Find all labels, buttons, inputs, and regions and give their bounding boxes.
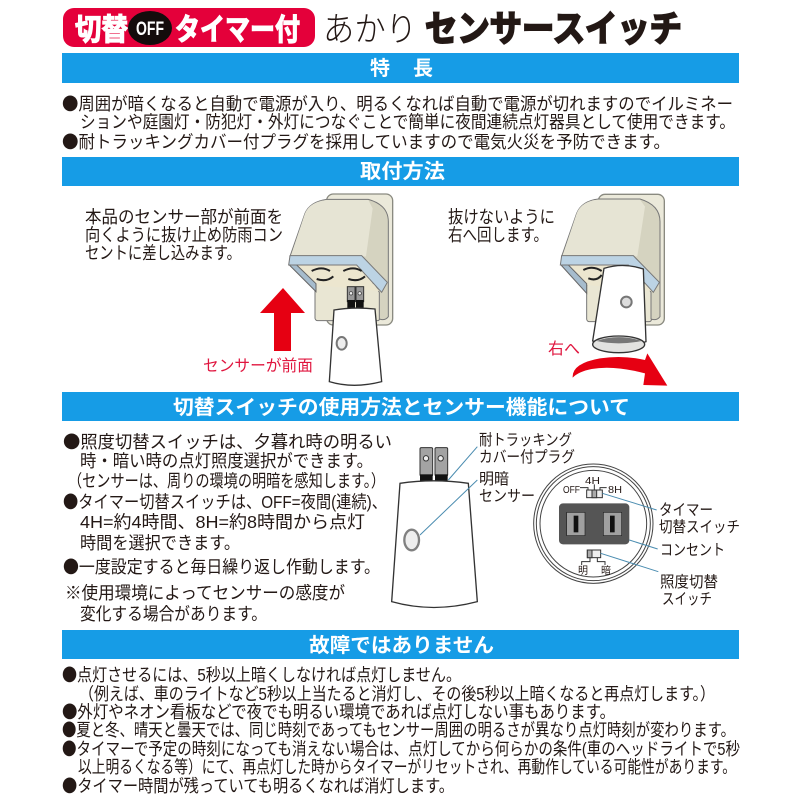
label: コンセント: コンセント	[660, 542, 725, 559]
text block: switch usage: 4H=約4時間、8H=約8時間から点灯	[80, 512, 365, 532]
arrow: red up arrow	[260, 288, 305, 351]
label: タイマー切替スイッチ	[659, 501, 740, 536]
text: step 1 instructions: セントに差し込みます。	[85, 243, 241, 263]
text: step 1 instructions: 本品のセンサー部が前面を	[85, 207, 283, 227]
text block: switch usage: 時間を選択できます。	[80, 533, 240, 553]
badge: 切替 OFF タイマー付: OFF	[136, 19, 164, 40]
heading bar: 取付方法	[62, 157, 739, 186]
label: 耐トラッキングカバー付プラグ: カバー付プラグ	[479, 448, 575, 466]
text block: switch usage	[63, 429, 392, 624]
text: step 2 instructions	[448, 207, 555, 245]
text: step 1 instructions: 向くように抜け止め防雨コン	[85, 225, 283, 245]
label: 右へ: 右へ	[548, 340, 580, 358]
illustration: plug body	[392, 447, 477, 607]
label: 明 暗: 暗	[601, 565, 611, 577]
label: 明暗センサー	[479, 470, 535, 505]
label: タイマー切替スイッチ: 切替スイッチ	[659, 518, 740, 536]
title: あかり: あかり	[323, 11, 417, 49]
badge: 切替 OFF タイマー付: 切替	[75, 14, 128, 47]
text block: switch usage: （センサーは、周りの環境の明暗を感知します。）	[68, 471, 385, 491]
text: step 1 instructions	[85, 207, 283, 263]
heading bar: 故障ではありません: 故障ではありません	[309, 634, 494, 657]
badge: 切替 OFF タイマー付: タイマー付	[175, 14, 300, 47]
text block: switch usage: ●タイマー切替スイッチは、OFF=夜間(連続)、	[63, 489, 387, 514]
label: センサーが前面: センサーが前面	[203, 357, 313, 375]
text block: switch usage: ※使用環境によってセンサーの感度が	[65, 583, 345, 603]
text block: troubleshooting	[62, 662, 740, 798]
text block: features	[62, 91, 735, 154]
diagram: plug face with switches	[534, 464, 740, 608]
text block: troubleshooting: ●点灯させるには、5秒以上暗くしなければ点灯しません。	[62, 662, 461, 687]
label: 照度切替スイッチ: スイッチ	[662, 591, 712, 608]
heading bar: 故障ではありません	[62, 630, 739, 659]
label: 明暗センサー: 明暗	[479, 470, 509, 488]
label: OFF 4H 8H: 8H	[608, 485, 622, 496]
diagram: plug with labels	[392, 431, 575, 607]
label: 明 暗	[578, 565, 611, 577]
text block: troubleshooting: ●タイマー時間が残っていても明るくなれば消灯します。	[62, 773, 454, 798]
illustration: plug rotated in outlet	[560, 194, 664, 353]
heading bar: 特長	[62, 53, 739, 83]
heading bar: 取付方法: 取付方法	[360, 160, 445, 183]
heading bar: 切替スイッチの使用方法とセンサー機能について: 切替スイッチの使用方法とセンサー機能について	[173, 396, 630, 419]
label: 照度切替スイッチ	[660, 573, 718, 608]
title	[63, 8, 682, 49]
label: 明暗センサー: センサー	[479, 488, 535, 505]
text block: switch usage: 時・暗い時の点灯照度選択ができます。	[80, 451, 373, 471]
title: センサースイッチ: センサースイッチ	[425, 8, 682, 49]
text block: features: ションや庭園灯・防犯灯・外灯につなぐことで簡単に夜間連続点灯器具として使用できます。	[80, 112, 735, 132]
text: step 2 instructions: 右へ回します。	[448, 225, 548, 245]
text block: troubleshooting: ●外灯やネオン看板などで夜でも明るい環境であれば点灯しない事もあります。	[62, 699, 615, 724]
label: 照度切替スイッチ: 照度切替	[660, 573, 718, 591]
label: OFF 4H 8H	[563, 476, 622, 496]
badge: 切替 OFF タイマー付	[63, 8, 315, 47]
text block: switch usage: 変化する場合があります。	[80, 604, 267, 624]
panel: installation step 2	[448, 194, 667, 386]
label: タイマー切替スイッチ: タイマー	[659, 501, 713, 519]
text block: features: ●周囲が暗くなると自動で電源が入り、明るくなれば自動で電源が切れますのでイルミネー	[62, 91, 733, 116]
arrow: red curved arrow to the right	[573, 353, 667, 386]
panel: installation step 1	[85, 194, 393, 385]
label: OFF 4H 8H: OFF	[563, 485, 580, 496]
illustration: round face and socket	[534, 464, 658, 583]
label: OFF 4H 8H: 4H	[585, 476, 600, 487]
text block: switch usage: ●照度切替スイッチは、夕暮れ時の明るい	[63, 429, 392, 454]
label: 耐トラッキングカバー付プラグ	[479, 431, 575, 466]
heading bar: 特長: 特 長	[370, 57, 433, 80]
text block: features: ●耐トラッキングカバー付プラグを採用していますので電気火災を予防できます。	[62, 129, 670, 154]
heading bar: 切替スイッチの使用方法とセンサー機能について	[62, 392, 739, 421]
label: 耐トラッキングカバー付プラグ: 耐トラッキング	[479, 431, 572, 449]
text block: switch usage: ●一度設定すると毎日繰り返し作動します。	[63, 554, 380, 579]
text: step 2 instructions: 抜けないように	[448, 207, 555, 227]
illustration: plug entering weatherproof outlet	[289, 194, 393, 385]
label: 明 暗: 明	[578, 565, 588, 577]
